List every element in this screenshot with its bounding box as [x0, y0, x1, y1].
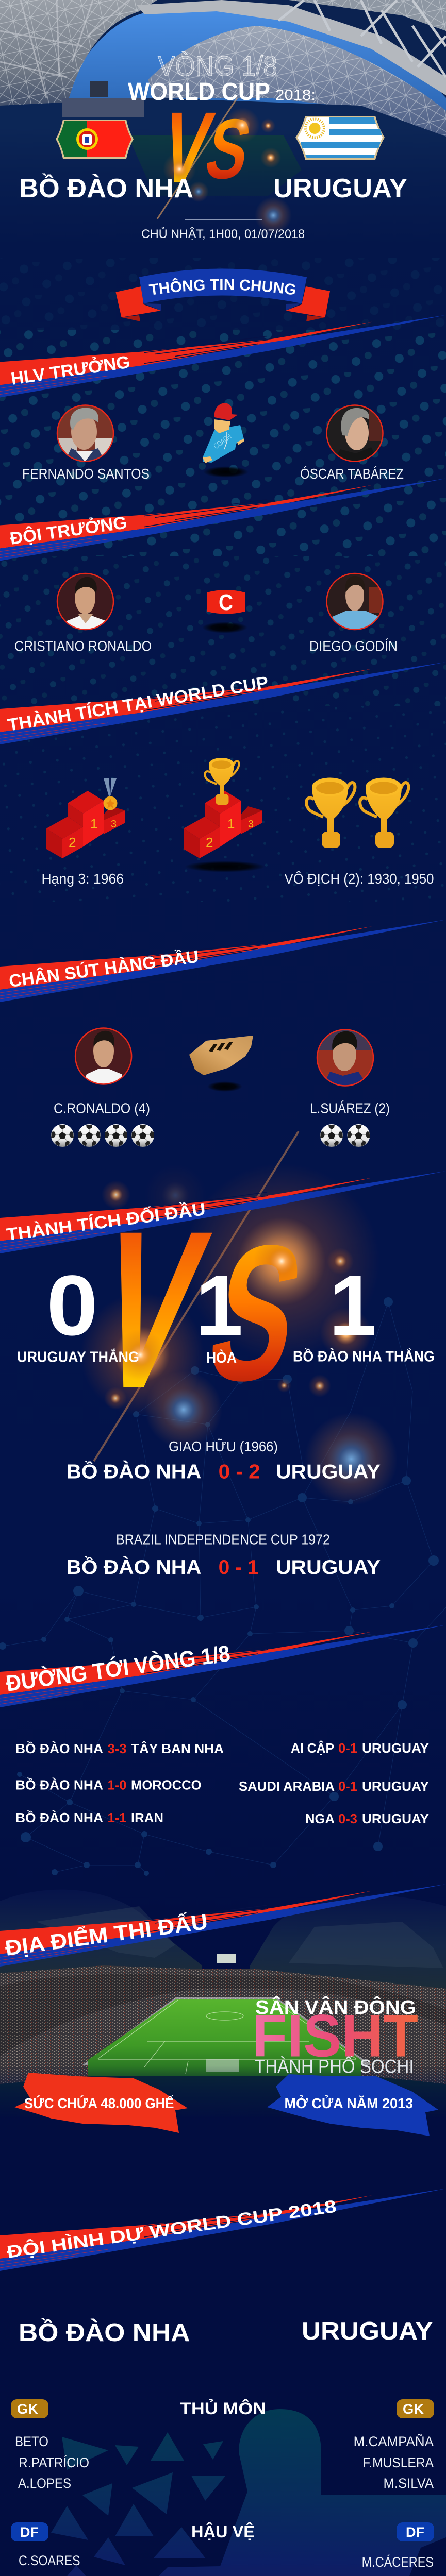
shattered player silhouette background	[11, 2409, 446, 2576]
coach names: ÓSCAR TABÁREZ	[300, 466, 404, 482]
group stage results: Bồ Đào Nha: 1-1	[107, 1810, 127, 1825]
flag: Uruguay	[295, 116, 385, 160]
icon: two trophies	[306, 778, 408, 848]
goalkeepers list: BETO	[15, 2434, 48, 2449]
goalkeepers list: R.PATRÍCIO	[19, 2455, 89, 2470]
past match: giao hữu 1966	[66, 1438, 381, 1483]
section heading: thành tích tại world cup: THÀNH TÍCH TẠI WORLD CUP	[6, 673, 270, 735]
icon: podium with medal: 2	[69, 835, 76, 850]
vs emblem large: S	[193, 1206, 319, 1421]
icon: podium with trophy: 1	[227, 816, 235, 832]
section heading: đội hình dự world cup 2018: ĐỘI HÌNH DỰ WORLD CUP 2018	[6, 2196, 338, 2262]
head to head totals: HÒA	[206, 1349, 237, 1366]
group stage results: Bồ Đào Nha: IRAN	[131, 1810, 163, 1825]
stadium name: FISHT	[252, 2002, 418, 2069]
past match: giao hữu 1966: URUGUAY	[276, 1461, 381, 1483]
top scorer names: C.RONALDO (4)	[54, 1100, 150, 1116]
section heading: đội hình dự world cup 2018	[0, 2189, 446, 2271]
goals: Ronaldo footballs	[51, 1124, 154, 1147]
captain names: CRISTIANO RONALDO	[14, 638, 152, 654]
portrait: Cristiano Ronaldo	[57, 573, 114, 631]
flag: Bồ Đào Nha	[56, 120, 134, 159]
group stage results: Uruguay: URUGUAY	[362, 1811, 429, 1826]
past match: brazil independence cup 1972: 0 - 1	[219, 1556, 259, 1579]
goals: Suárez footballs	[320, 1124, 370, 1147]
stadium name: THÀNH PHỐ SOCHI	[255, 2056, 414, 2077]
podium shadow	[185, 861, 265, 872]
head to head totals: URUGUAY THẮNG	[17, 1348, 139, 1366]
goalkeepers: badges and heading: THỦ MÔN	[180, 2399, 266, 2418]
group stage results: Uruguay: 0-3	[338, 1811, 357, 1826]
vs emblem large: V	[76, 1184, 224, 1435]
head to head totals: 0	[46, 1258, 98, 1353]
section heading: đội trưởng	[0, 478, 446, 561]
icon: podium with medal: 3	[111, 819, 117, 830]
network background	[0, 1297, 446, 1876]
section heading: đường tới vòng 1/8: ĐƯỜNG TỚI VÒNG 1/8	[5, 1640, 232, 1697]
icon: coach: COACH	[212, 432, 233, 451]
past match: giao hữu 1966: GIAO HỮU (1966)	[169, 1438, 278, 1454]
defenders list: C.SOARES	[19, 2553, 80, 2568]
section heading: hlv trưởng	[0, 315, 446, 398]
vs emblem and glows: S	[198, 102, 259, 197]
head to head glow effects	[80, 1131, 398, 1505]
defenders: badges and heading: DF	[20, 2524, 39, 2540]
coach icon shadow	[203, 466, 249, 478]
title: vòng 1/8 world cup 2018: 2018:	[275, 87, 316, 104]
goalkeepers list	[15, 2433, 434, 2491]
group stage results: Uruguay: NGA	[305, 1811, 335, 1826]
group stage results: Uruguay: URUGUAY	[362, 1778, 429, 1794]
defenders list: M.CÁCERES	[362, 2554, 434, 2570]
boot shadow	[207, 1081, 242, 1092]
section heading: chân sút hàng đầu: CHÂN SÚT HÀNG ĐẦU	[8, 947, 200, 991]
ribbon: thông tin chung: THÔNG TIN CHUNG	[148, 278, 295, 295]
portrait: Diego Godín	[326, 573, 384, 631]
goalkeepers list: A.LOPES	[18, 2476, 71, 2491]
section heading: thành tích đối đầu: THÀNH TÍCH ĐỐI ĐẦU	[5, 1199, 207, 1245]
goalkeepers: badges and heading	[11, 2399, 434, 2418]
date and time: CHỦ NHẬT, 1H00, 01/07/2018	[141, 226, 305, 241]
goalkeepers list: M.SILVA	[384, 2476, 434, 2491]
defenders: badges and heading: HẬU VỆ	[191, 2522, 255, 2541]
ribbon: thông tin chung	[115, 269, 330, 321]
icon: captain armband: C	[219, 590, 233, 615]
goalkeepers: badges and heading: GK	[403, 2401, 424, 2417]
portrait: Fernando Santos	[57, 405, 116, 464]
match teams heading	[19, 173, 407, 204]
group stage results: Bồ Đào Nha: BỒ ĐÀO NHA	[15, 1741, 103, 1756]
vs emblem and glows	[152, 91, 292, 234]
section heading: địa điểm thi đấu: ĐỊA ĐIỂM THI ĐẤU	[4, 1909, 209, 1960]
group stage results: Bồ Đào Nha: 1-0	[107, 1777, 127, 1793]
title: vòng 1/8 world cup 2018: VÒNG 1/8	[158, 50, 277, 82]
goalkeepers list: M.CAMPAÑA	[354, 2433, 434, 2449]
opened year brush panel	[267, 2074, 438, 2136]
icon: podium with trophy: 2	[206, 835, 213, 850]
defenders: badges and heading: DF	[406, 2524, 424, 2540]
top scorer names: L.SUÁREZ (2)	[310, 1100, 390, 1116]
group stage results: Bồ Đào Nha: MOROCCO	[131, 1777, 201, 1793]
armband shadow	[202, 622, 247, 633]
group stage results: Uruguay: AI CẬP	[291, 1740, 334, 1756]
section heading: địa điểm thi đấu	[0, 1884, 446, 1967]
capacity brush panel	[14, 2073, 188, 2133]
decorative dot pattern background	[0, 258, 446, 902]
section heading: hlv trưởng: HLV TRƯỞNG	[10, 352, 131, 389]
icon: golden boot	[189, 1036, 253, 1075]
icon: podium with medal	[46, 778, 125, 858]
squad team names	[19, 2317, 433, 2347]
goalkeepers: badges and heading: GK	[17, 2401, 39, 2417]
group stage results: Bồ Đào Nha: 3-3	[107, 1741, 127, 1756]
captain names: DIEGO GODÍN	[309, 638, 398, 654]
icon: podium with trophy: 3	[248, 819, 254, 830]
icon: captain armband	[207, 590, 245, 615]
title: vòng 1/8 world cup 2018: WORLD CUP	[128, 78, 270, 106]
opened year brush panel: MỞ CỬA NĂM 2013	[285, 2095, 413, 2111]
stadium roof photo header	[0, 0, 446, 247]
squad team names: URUGUAY	[302, 2317, 433, 2345]
portrait: L.Suárez scorer	[317, 1029, 374, 1087]
icon: coach	[203, 403, 244, 463]
coach names: FERNANDO SANTOS	[22, 466, 150, 482]
section heading: đội trưởng: ĐỘI TRƯỞNG	[9, 512, 128, 549]
group stage results: Bồ Đào Nha: BỒ ĐÀO NHA	[15, 1810, 103, 1825]
world cup record captions	[41, 871, 434, 887]
group stage results: Uruguay: 0-1	[338, 1740, 357, 1756]
defenders list	[18, 2553, 434, 2576]
capacity brush panel: SỨC CHỨA 48.000 GHẾ	[24, 2095, 174, 2111]
vs emblem and glows: V	[152, 91, 221, 204]
past match: giao hữu 1966: 0 - 2	[219, 1461, 260, 1483]
head to head totals: 1	[329, 1258, 376, 1353]
match teams heading: URUGUAY	[273, 174, 407, 204]
section heading: đường tới vòng 1/8	[0, 1625, 446, 1707]
portrait: Óscar Tabárez	[326, 405, 384, 463]
stadium name: SÂN VẬN ĐỘNG	[255, 1995, 416, 2019]
world cup record captions: VÔ ĐỊCH (2): 1930, 1950	[285, 871, 434, 887]
group stage results: Bồ Đào Nha	[15, 1741, 224, 1825]
section heading: thành tích đối đầu	[0, 1171, 446, 1253]
group stage results: Bồ Đào Nha: BỒ ĐÀO NHA	[15, 1777, 103, 1793]
head to head totals: 1	[195, 1258, 243, 1353]
head to head totals: BỒ ĐÀO NHA THẮNG	[293, 1348, 435, 1365]
captain names	[14, 638, 398, 654]
coach names	[22, 466, 404, 482]
group stage results: Uruguay	[239, 1740, 429, 1826]
group stage results: Uruguay: URUGUAY	[362, 1740, 429, 1756]
icon: podium with medal: 1	[90, 816, 97, 832]
portrait: C.Ronaldo scorer	[75, 1028, 133, 1086]
goalkeepers list: F.MUSLERA	[362, 2455, 434, 2470]
defenders: badges and heading	[11, 2522, 434, 2541]
section heading: chân sút hàng đầu	[0, 920, 446, 1002]
past match: brazil independence cup 1972: URUGUAY	[276, 1556, 381, 1579]
stadium photo	[0, 1890, 446, 2128]
group stage results: Uruguay: SAUDI ARABIA	[239, 1778, 335, 1794]
title: vòng 1/8 world cup 2018	[128, 50, 316, 106]
group stage results: Uruguay: 0-1	[338, 1778, 357, 1794]
past match: brazil independence cup 1972: BRAZIL INDEPENDENCE CUP 1972	[116, 1532, 330, 1548]
past match: brazil independence cup 1972: BỒ ĐÀO NHA	[66, 1556, 201, 1579]
past match: brazil independence cup 1972	[66, 1532, 381, 1579]
past match: giao hữu 1966: BỒ ĐÀO NHA	[66, 1460, 201, 1483]
top scorer names	[54, 1100, 390, 1116]
icon: podium with trophy	[184, 758, 262, 858]
squad team names: BỒ ĐÀO NHA	[19, 2318, 190, 2347]
group stage results: Bồ Đào Nha: TÂY BAN NHA	[131, 1741, 224, 1756]
head to head totals	[17, 1258, 435, 1366]
match teams heading: BỒ ĐÀO NHA	[19, 173, 193, 204]
world cup record captions: Hạng 3: 1966	[41, 871, 124, 887]
section heading: thành tích tại world cup	[0, 662, 446, 744]
